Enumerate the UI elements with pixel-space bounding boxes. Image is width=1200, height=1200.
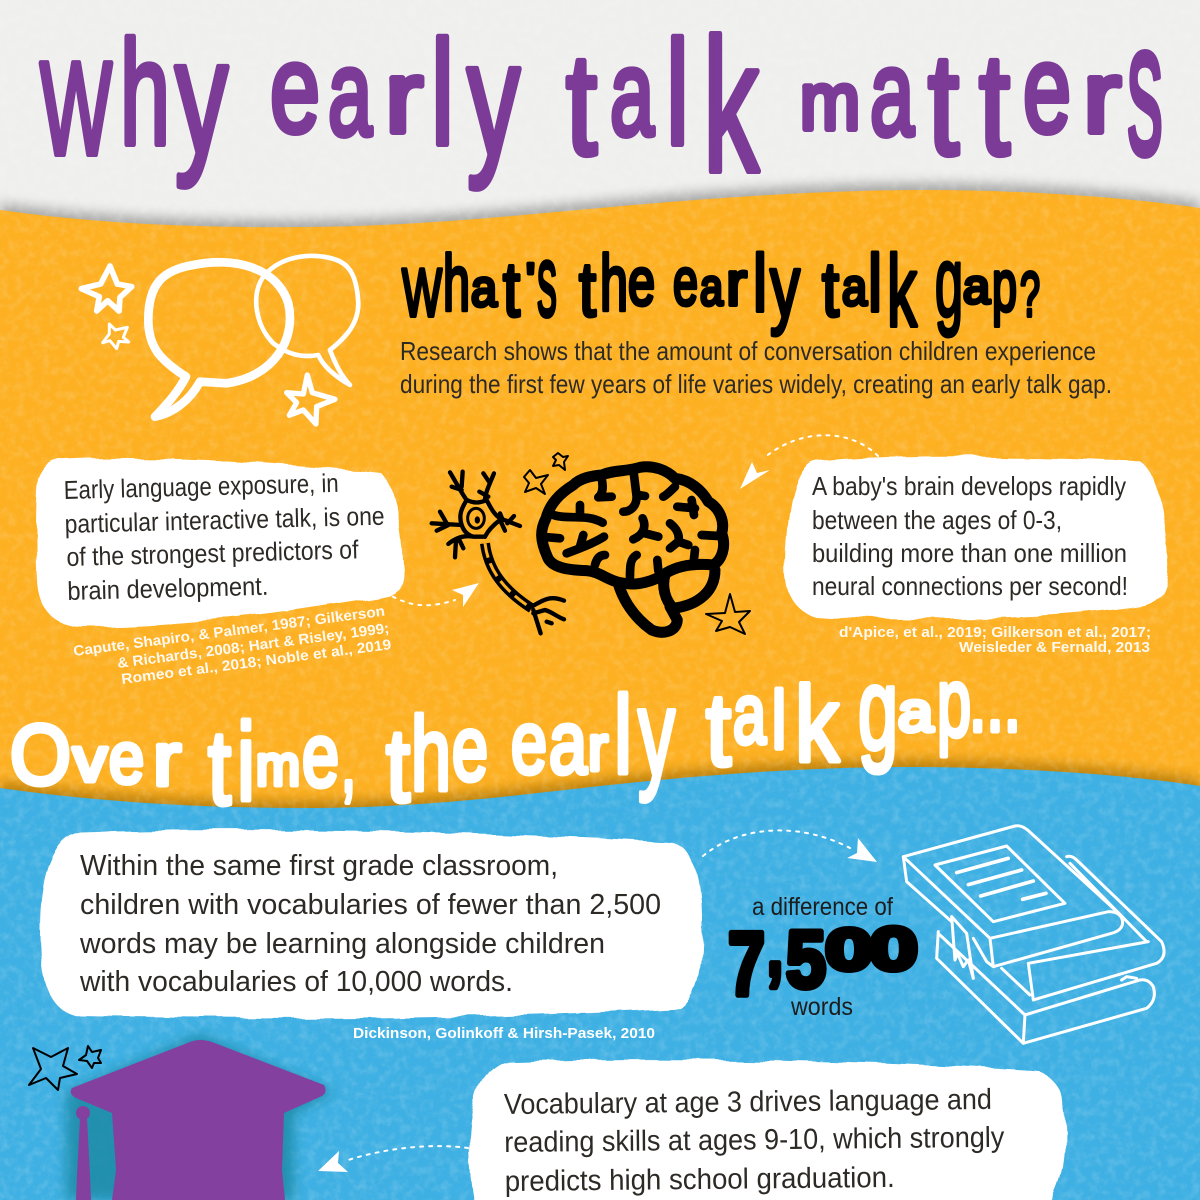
heading: over time, the early talk gap: O: [10, 708, 71, 803]
heading: over time, the early talk gap: a: [733, 667, 767, 762]
heading: what's the early talk gap: h: [600, 238, 628, 327]
title: e: [270, 20, 320, 159]
heading: what's the early talk gap: p: [992, 246, 1017, 327]
citation: left: [72, 604, 392, 688]
callout: baby's brain: A baby's brain develops rapidly: [812, 471, 1126, 501]
heading: over time, the early talk gap: a: [549, 692, 587, 792]
heading: over time, the early talk gap: a: [898, 680, 934, 743]
arrow: callout to cap: [318, 1146, 468, 1172]
callout: early language exposure: of the strongest predictors of: [66, 534, 359, 572]
title: l: [666, 11, 689, 176]
large speech bubble: [148, 262, 290, 417]
citation: right: Weisleder & Fernald, 2013: [959, 640, 1150, 656]
title: a: [870, 25, 914, 161]
heading: what's the early talk gap: e: [673, 244, 698, 320]
arrow: callout to brain: [740, 435, 878, 489]
citation: left: Capute, Shapiro, & Palmer, 1987; Gilkerson: [72, 604, 386, 660]
callout: early language exposure: brain development.: [67, 571, 269, 606]
heading: what's the early talk gap: W: [402, 255, 442, 331]
heading: what's the early talk gap: e: [628, 244, 655, 320]
stat: 7,500 words: a difference of: [752, 893, 893, 921]
callout: early language exposure: Early language exposure, in: [63, 468, 339, 505]
heading: what's the early talk gap: y: [770, 236, 800, 336]
callout: baby's brain: building more than one million: [812, 538, 1127, 568]
heading: over time, the early talk gap: i: [237, 701, 255, 824]
title: [40, 0, 1163, 212]
star: [287, 375, 335, 424]
callout: first grade classroom: Within the same first grade classroom,: [80, 850, 558, 882]
title: l: [431, 11, 454, 176]
heading: what's the early talk gap: a: [963, 261, 990, 314]
title: a: [610, 25, 654, 161]
heading: over time, the early talk gap: e: [511, 692, 547, 792]
background: blue wave band: [0, 760, 1200, 1200]
citation: right: d'Apice, et al., 2019; Gilkerson et al., 2017;: [839, 625, 1151, 641]
title: y: [175, 5, 228, 188]
title: m: [800, 57, 860, 147]
icon: stars near cap: [29, 1046, 101, 1090]
title: k: [703, 1, 759, 212]
title: h: [120, 11, 170, 176]
heading: what's the early talk gap: ': [526, 254, 535, 305]
heading: over time, the early talk gap: y: [638, 666, 675, 803]
heading: what's the early talk gap: [402, 224, 1040, 348]
heading: over time, the early talk gap: ...: [969, 651, 1021, 751]
heading: over time, the early talk gap: t: [208, 709, 231, 827]
callout: first grade classroom: children with vocabularies of fewer than 2,500: [80, 889, 661, 921]
callout: vocabulary at age 3: reading skills at ages 9-10, which strongly: [504, 1122, 1005, 1159]
heading: what's the early talk gap: r: [726, 250, 747, 319]
title: t: [928, 24, 959, 185]
heading: over time, the early talk gap: g: [858, 644, 898, 774]
callout: vocabulary at age 3: predicts high school graduation.: [505, 1162, 895, 1198]
heading: over time, the early talk gap: v: [73, 726, 107, 795]
icon: brain: [542, 467, 724, 632]
arrow: callout to books: [703, 830, 877, 862]
heading: what's the early talk gap: a: [700, 259, 723, 317]
callout: vocabulary at age 3: [469, 1060, 1066, 1200]
stat: 7,500 words: 0: [828, 920, 870, 980]
icon: stack of books: [903, 826, 1164, 1043]
citation: left: Romeo et al., 2018; Noble et al., 2019: [120, 637, 392, 688]
heading: over time, the early talk gap: t: [706, 672, 731, 787]
arrow: callout to neuron: [385, 583, 479, 607]
heading: what's the early talk gap: h: [443, 238, 470, 327]
title: e: [1023, 20, 1071, 159]
heading: over time, the early talk gap: h: [411, 696, 451, 813]
heading: over time, the early talk gap: e: [109, 719, 144, 799]
title: t: [566, 24, 597, 185]
icon: small stars near brain: [524, 453, 568, 494]
heading: over time, the early talk gap: k: [795, 664, 839, 784]
callout: first grade classroom: [40, 830, 702, 1018]
heading: what's the early talk gap: t: [579, 247, 596, 333]
callout: first grade classroom: words may be learning alongside children: [79, 928, 605, 960]
tassel: [76, 1106, 91, 1200]
background: orange wave band: [0, 183, 1200, 830]
heading: over time, the early talk gap: e: [452, 698, 488, 800]
stat: 7,500 words: 0: [872, 917, 915, 980]
callout: baby's brain: between the ages of 0-3,: [812, 505, 1062, 535]
title: y: [467, 7, 520, 190]
title: t: [979, 24, 1010, 185]
title: W: [40, 35, 112, 182]
callout: baby's brain: [786, 457, 1168, 620]
heading: over time, the early talk gap: l: [614, 674, 632, 797]
heading: what's the early talk gap: l: [868, 239, 882, 329]
icon: graduation cap: [66, 1034, 334, 1200]
small speech bubble: [256, 256, 358, 385]
icon: speech bubbles with stars: [81, 256, 358, 424]
heading: what's the early talk gap: ?: [1020, 260, 1040, 330]
title: a: [328, 25, 372, 161]
star: [103, 324, 129, 349]
title: r: [385, 40, 423, 154]
heading: over time, the early talk gap: r: [588, 712, 608, 784]
title: r: [1083, 40, 1121, 154]
callout: vocabulary at age 3: Vocabulary at age 3 drives language and: [504, 1084, 992, 1121]
stat: 7,500 words: words: [790, 993, 853, 1021]
background: paper header: [0, 0, 1200, 240]
stat: 7,500 words: 7: [728, 915, 765, 1015]
callout: early language exposure: [36, 458, 404, 627]
heading: over time, the early talk gap: t: [386, 708, 410, 824]
citation: Dickinson: Dickinson, Golinkoff & Hirsh-Pasek, 2010: [353, 1026, 655, 1042]
heading: what's the early talk gap: l: [753, 239, 767, 329]
intro text: Research shows that the amount of conversation children experience: [400, 336, 1096, 366]
heading: what's the early talk gap: t: [822, 247, 839, 333]
callout: baby's brain: neural connections per second!: [812, 571, 1128, 601]
heading: what's the early talk gap: g: [935, 226, 963, 337]
citation: right: [839, 625, 1151, 656]
heading: what's the early talk gap: k: [887, 236, 917, 348]
heading: over time, the early talk gap: m: [256, 734, 300, 798]
heading: what's the early talk gap: a: [842, 259, 867, 317]
citation: left: & Richards, 2008; Hart & Risley, 1999;: [116, 621, 390, 672]
callout: early language exposure: particular interactive talk, is one: [64, 501, 385, 539]
star: [81, 266, 132, 311]
heading: over time, the early talk gap: e: [302, 706, 339, 806]
stat: 7,500 words: 5: [786, 915, 826, 1005]
heading: over time, the early talk gap: l: [772, 675, 786, 766]
stat: 7,500 words: ,: [767, 903, 783, 992]
heading: what's the early talk gap: s: [537, 224, 557, 338]
icon: star near brain: [706, 594, 750, 634]
stat: 7,500 words: [728, 893, 915, 1021]
callout: first grade classroom: with vocabularies of 10,000 words.: [79, 966, 513, 998]
heading: over time, the early talk gap: [10, 644, 1021, 827]
heading: over time, the early talk gap: r: [153, 717, 181, 801]
icon: neuron: [432, 472, 564, 633]
heading: over time, the early talk gap: p: [937, 648, 971, 757]
heading: over time, the early talk gap: ,: [341, 711, 356, 811]
heading: what's the early talk gap: a: [471, 260, 497, 318]
intro text: [400, 336, 1112, 399]
intro text: during the first few years of life varies widely, creating an early talk gap.: [400, 369, 1112, 399]
heading: what's the early talk gap: t: [503, 247, 520, 333]
